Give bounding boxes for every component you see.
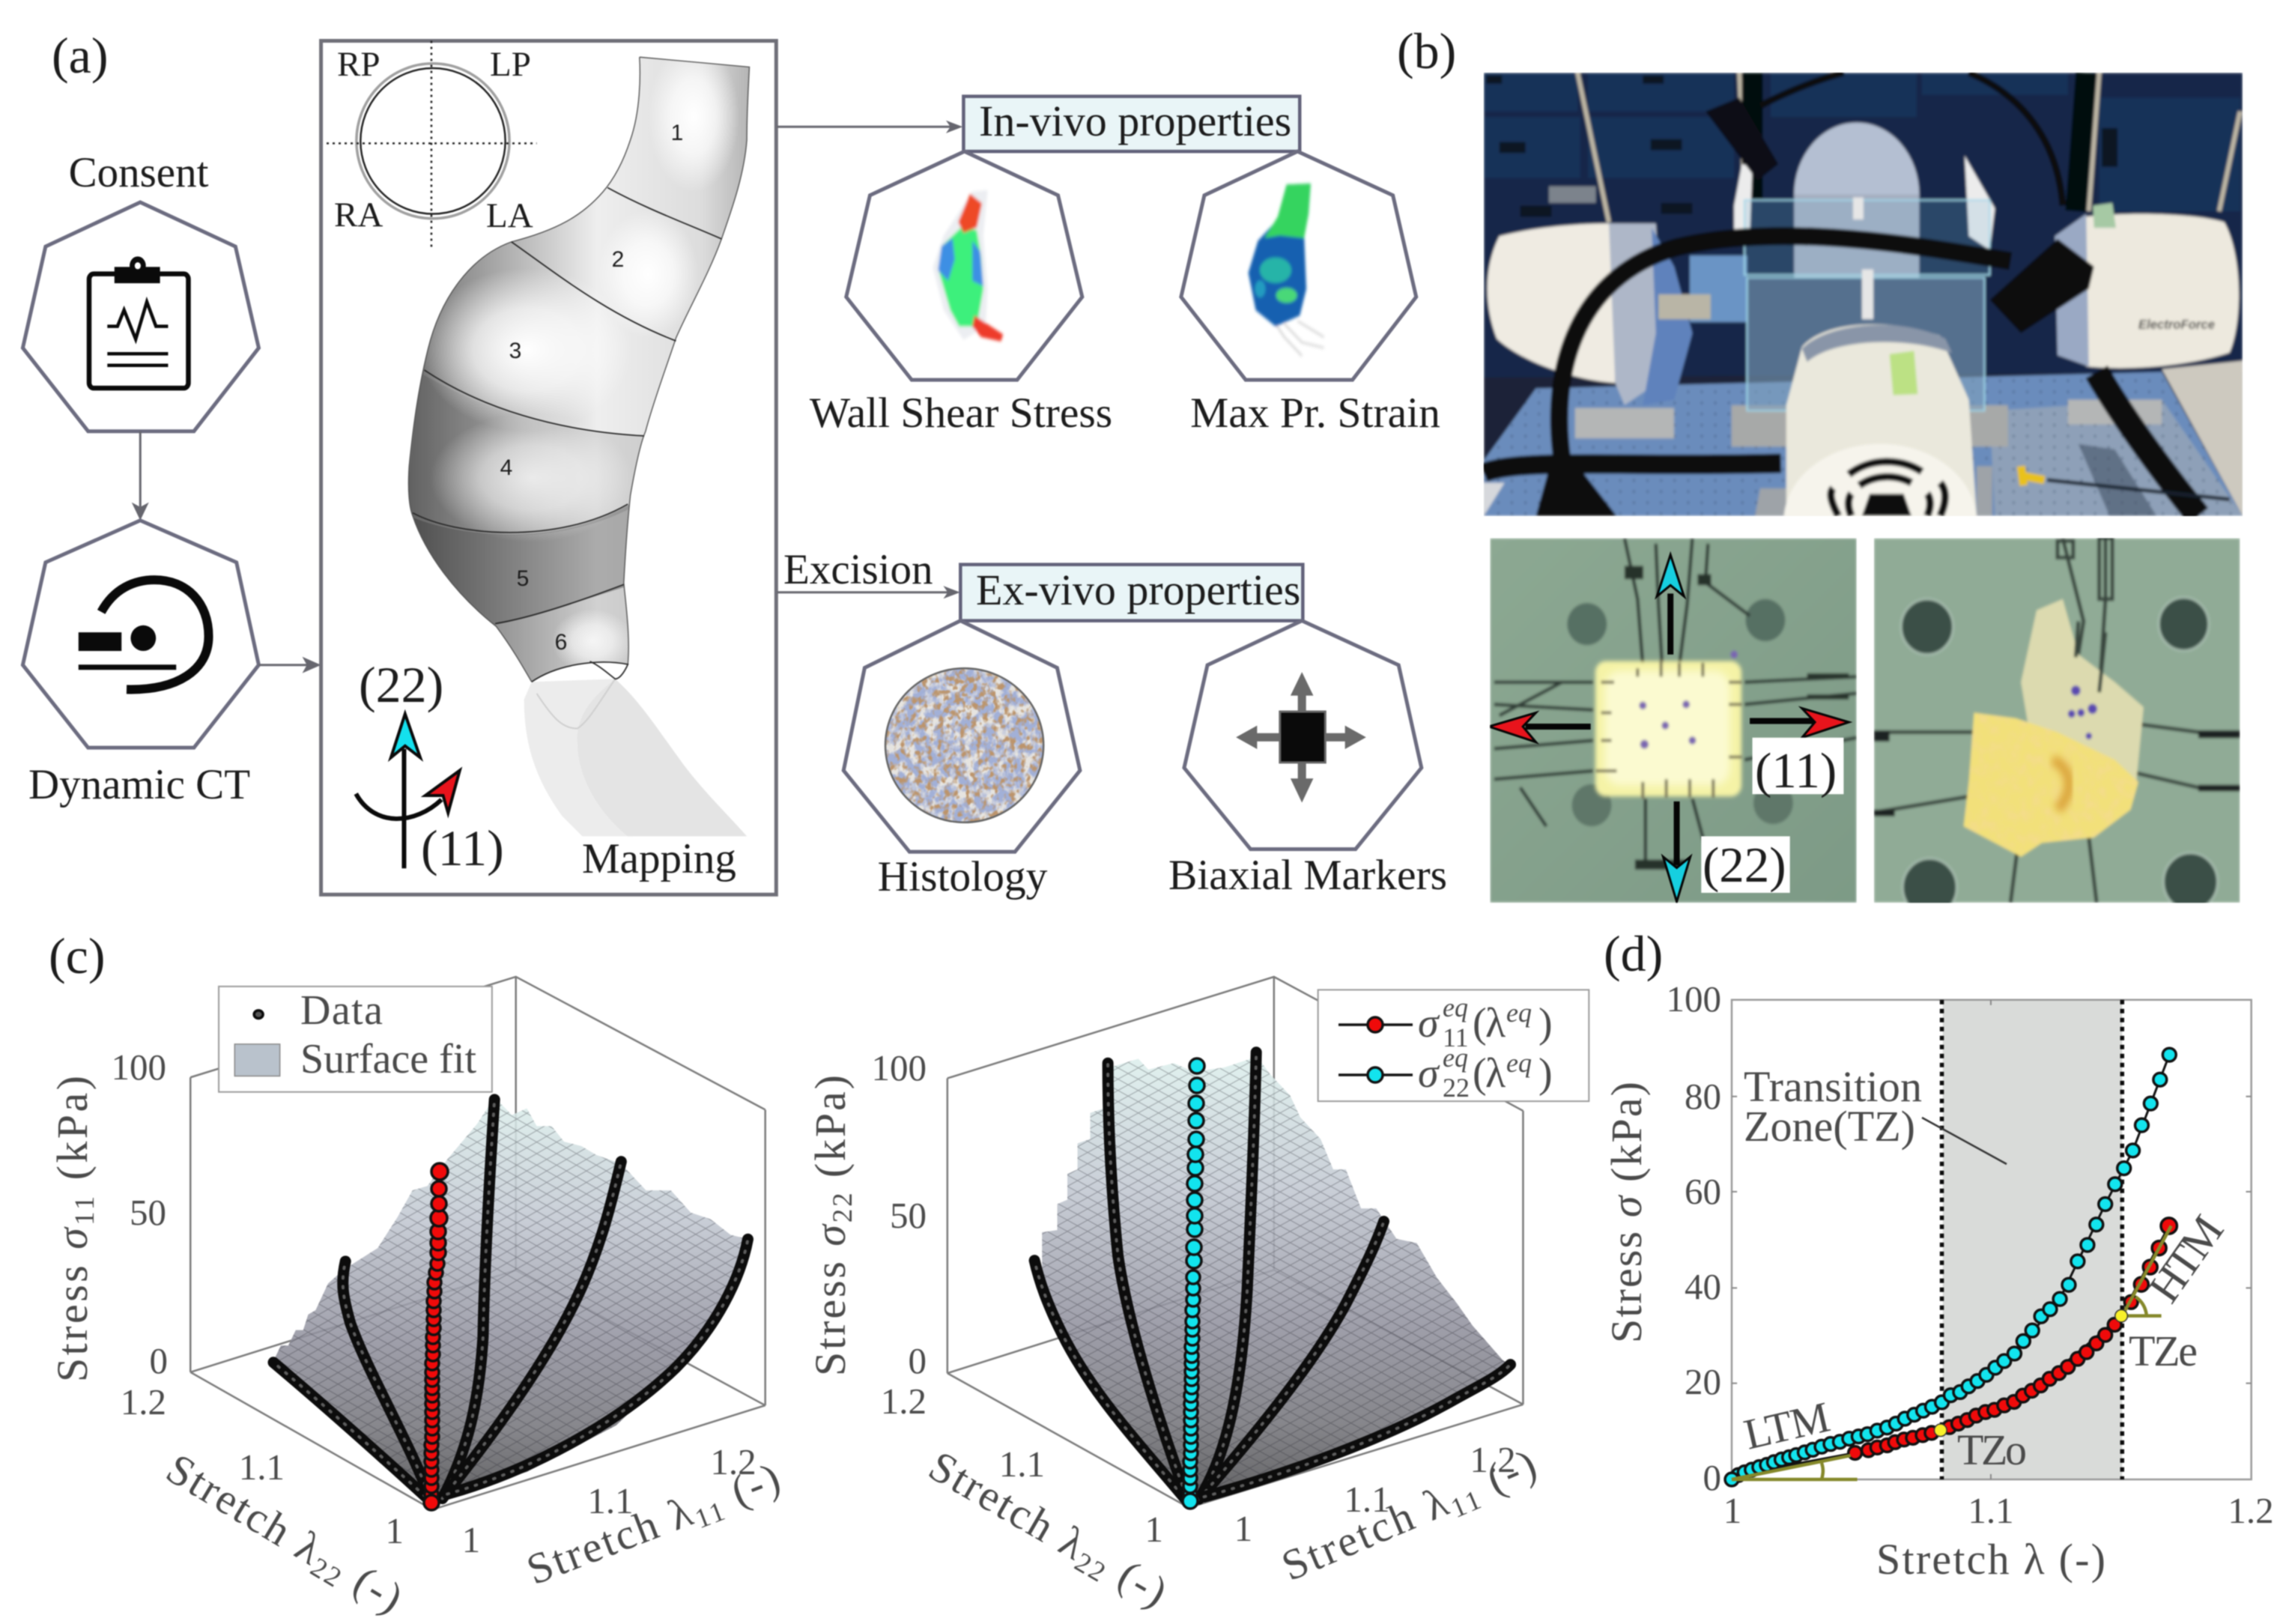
cyan equibiaxial curve [1725, 1048, 2176, 1486]
photo: square specimen [1489, 538, 1857, 903]
segment numbers [500, 121, 683, 655]
axis label: stress: Stress σ [806, 1225, 855, 1376]
axis label: stretch 11: Stretch λ [520, 1487, 699, 1594]
panel: biaxial device photo: ElectroForce [2138, 316, 2215, 332]
legend: ) [1538, 1050, 1553, 1097]
label: Histology: Histology [878, 853, 1048, 900]
tick labels: 50 [130, 1192, 166, 1233]
legend: σ [1418, 1050, 1440, 1097]
inset: cross-section ring with quadrants [327, 40, 537, 248]
callout leader: TZ [1922, 1118, 2007, 1164]
panel: biaxial device photo [1483, 72, 2244, 517]
tick labels: 1 [1144, 1509, 1163, 1550]
axis label: stretch 22: (-) [334, 1550, 411, 1623]
tick labels: 1 [462, 1519, 480, 1560]
heading: Ex-vivo properties: Ex-vivo properties [976, 566, 1300, 614]
legend: eq [1443, 993, 1468, 1022]
axis label: stretch 11: (-) [1467, 1440, 1543, 1509]
axis label: stress: 11 [70, 1196, 100, 1225]
legend: ) [1538, 1000, 1553, 1046]
icon: clipboard in heptagon [22, 202, 258, 431]
annotation: TZe: TZe [2129, 1327, 2198, 1375]
label: (11): (11) [1755, 743, 1837, 799]
axis label: stress: 22 [828, 1193, 858, 1222]
panel: consent and CT workflow [22, 149, 321, 808]
annotation: transition zone [1744, 1062, 1922, 1151]
tick labels: 1.2 [881, 1381, 927, 1422]
arrow: consent to CT [132, 431, 149, 521]
axis label: stretch 22: 22 [1070, 1547, 1111, 1588]
axis label: stress: (kPa) [48, 1076, 97, 1193]
x tick labels [1723, 1490, 2274, 1531]
axis label: stretch: Stretch λ (-) [1876, 1535, 2105, 1584]
panel: tissue specimen photo [1874, 538, 2240, 916]
panel: mapping of aorta [321, 40, 776, 894]
legend: eq [1506, 1048, 1532, 1078]
chart: stress sigma11 surface [48, 977, 788, 1624]
arrow: to in-vivo [777, 121, 962, 133]
tick labels: 100 [111, 1046, 166, 1088]
y tick labels [1666, 978, 1721, 1498]
axis label: stretch 11: (-) [712, 1453, 786, 1521]
icon: max principal strain map [1181, 151, 1416, 380]
icon: axes (22) and (11) [356, 656, 504, 876]
segment numbers: 6 [555, 630, 567, 655]
tick labels: 50 [890, 1195, 927, 1236]
tick labels: 1.1 [1344, 1479, 1390, 1520]
label: Dynamic CT: Dynamic CT [28, 761, 250, 808]
legend: σ [1418, 1000, 1440, 1046]
legend: λ [1485, 1000, 1506, 1046]
tick labels [111, 1046, 757, 1560]
y tick labels: 40 [1685, 1266, 1721, 1307]
annotation: HTM: HTM [2139, 1206, 2233, 1311]
y tick labels: 20 [1685, 1361, 1721, 1402]
mapping frame [321, 40, 776, 894]
legend: ( [1473, 1000, 1487, 1046]
legend [219, 987, 492, 1092]
tick labels: 0 [150, 1340, 168, 1381]
legend: eq [1443, 1043, 1468, 1073]
transition markers [1934, 1309, 2127, 1437]
legend: Surface fit [300, 1036, 476, 1082]
legend: λ [1485, 1050, 1506, 1097]
tick labels [872, 1047, 1516, 1550]
y tick labels: 0 [1703, 1457, 1721, 1498]
icon: axes (22) and (11): (22) [359, 656, 443, 713]
icon: biaxial markers [1184, 621, 1422, 849]
axis label: stress: Stress σ [48, 1228, 97, 1382]
chart: stress-stretch curves [1602, 978, 2274, 1584]
axis label: stretch 11: Stretch λ [1275, 1477, 1455, 1590]
panel: ex-vivo properties [777, 546, 1447, 900]
red equibiaxial curve [1732, 1218, 2177, 1479]
modulus tangent lines [1732, 1226, 2171, 1479]
axis label: stretch 11: 11 [1446, 1485, 1485, 1524]
tick labels: 1.2 [710, 1441, 757, 1482]
panel label (c): (c) [49, 927, 105, 984]
chart: stress sigma22 surface [806, 977, 1589, 1620]
3D axes box [190, 977, 765, 1509]
heading: Consent: Consent [69, 149, 209, 196]
label: Biaxial Markers: Biaxial Markers [1168, 852, 1447, 899]
axis label: stretch 22: Stretch λ [158, 1443, 330, 1574]
arrow: to ex-vivo [777, 586, 960, 599]
legend: 11 [1443, 1022, 1469, 1052]
axis label: stretch 22: 22 [305, 1552, 347, 1593]
tick labels: 1.1 [239, 1446, 285, 1488]
tick labels: 100 [872, 1047, 927, 1088]
annotation: transition zone: Transition [1744, 1062, 1922, 1111]
annotation: transition zone: Zone(TZ) [1744, 1102, 1915, 1151]
axis label: stress: Stress σ (kPa) [1602, 1082, 1651, 1343]
panel label (b): (b) [1397, 22, 1456, 79]
legend [1318, 990, 1589, 1103]
segment numbers: 4 [500, 455, 512, 480]
transition zone boundaries [1942, 1000, 2122, 1479]
icon: histology slide [843, 621, 1080, 852]
panel: in-vivo properties [777, 97, 1440, 437]
segment numbers: 5 [517, 566, 529, 591]
tick labels: 0 [908, 1340, 927, 1381]
annotation: LTM: LTM [1739, 1392, 1834, 1459]
legend: 22 [1443, 1073, 1470, 1103]
segment numbers: 3 [509, 339, 521, 363]
tick labels: 1 [1234, 1508, 1252, 1549]
transition zone band [1943, 1000, 2122, 1479]
tick labels: 1.1 [587, 1480, 634, 1521]
segment numbers: 2 [612, 247, 624, 272]
y tick labels: 60 [1685, 1171, 1721, 1212]
axis label: stretch 22: (-) [1099, 1544, 1175, 1617]
tick labels: 1.2 [121, 1381, 166, 1422]
x tick labels: 1.1 [1968, 1490, 2014, 1531]
inset: cross-section ring with quadrants: RA [334, 196, 383, 234]
panel label (a): (a) [52, 27, 108, 84]
x tick labels: 1 [1723, 1490, 1741, 1531]
legend: ( [1473, 1050, 1487, 1097]
data curves [273, 1100, 748, 1503]
segment numbers: 1 [671, 121, 683, 145]
illustration: iliac branches [524, 679, 747, 836]
red equibiaxial series [424, 1163, 448, 1510]
fitted surface [1042, 1057, 1511, 1503]
fitted surface [273, 1097, 748, 1503]
axis label: stretch 11: 11 [691, 1496, 729, 1535]
3D axes box [948, 977, 1523, 1508]
icon: axes (22) and (11): (11) [421, 819, 504, 876]
annotation: TZo: TZo [1957, 1425, 2027, 1474]
label: Max Pr. Strain: Max Pr. Strain [1190, 390, 1440, 437]
label: Mapping: Mapping [582, 835, 736, 882]
inset: cross-section ring with quadrants: LA [486, 196, 533, 235]
icon: CT scanner in heptagon [22, 521, 258, 748]
heading: In-vivo properties: In-vivo properties [979, 97, 1291, 145]
illustration: segmented aneurysm [400, 40, 754, 688]
tick labels: 1.1 [999, 1443, 1045, 1485]
y tick labels: 100 [1666, 978, 1721, 1019]
legend: Data [300, 987, 383, 1034]
data curves [1034, 1052, 1511, 1503]
axis label: stress: (kPa) [806, 1075, 855, 1191]
icon: wall shear stress map [846, 151, 1082, 380]
inset: cross-section ring with quadrants: LP [490, 45, 531, 84]
legend: eq [1506, 998, 1532, 1028]
y tick labels: 80 [1685, 1076, 1721, 1117]
arrow: CT to mapping [258, 657, 321, 673]
inset: cross-section ring with quadrants: RP [337, 45, 381, 84]
tick labels: 1.2 [1470, 1439, 1516, 1480]
label: Excision: Excision [783, 546, 933, 593]
axes box [1732, 1000, 2252, 1479]
x tick labels: 1.2 [2228, 1490, 2274, 1531]
label: Wall Shear Stress: Wall Shear Stress [810, 390, 1112, 437]
cyan equibiaxial series [1183, 1058, 1204, 1509]
axis label: stretch 22: Stretch λ [921, 1441, 1094, 1569]
panel: specimen with markers photo [1489, 538, 1857, 903]
label: (22): (22) [1703, 837, 1786, 893]
tick labels: 1 [385, 1510, 404, 1551]
panel label (d): (d) [1604, 925, 1663, 982]
